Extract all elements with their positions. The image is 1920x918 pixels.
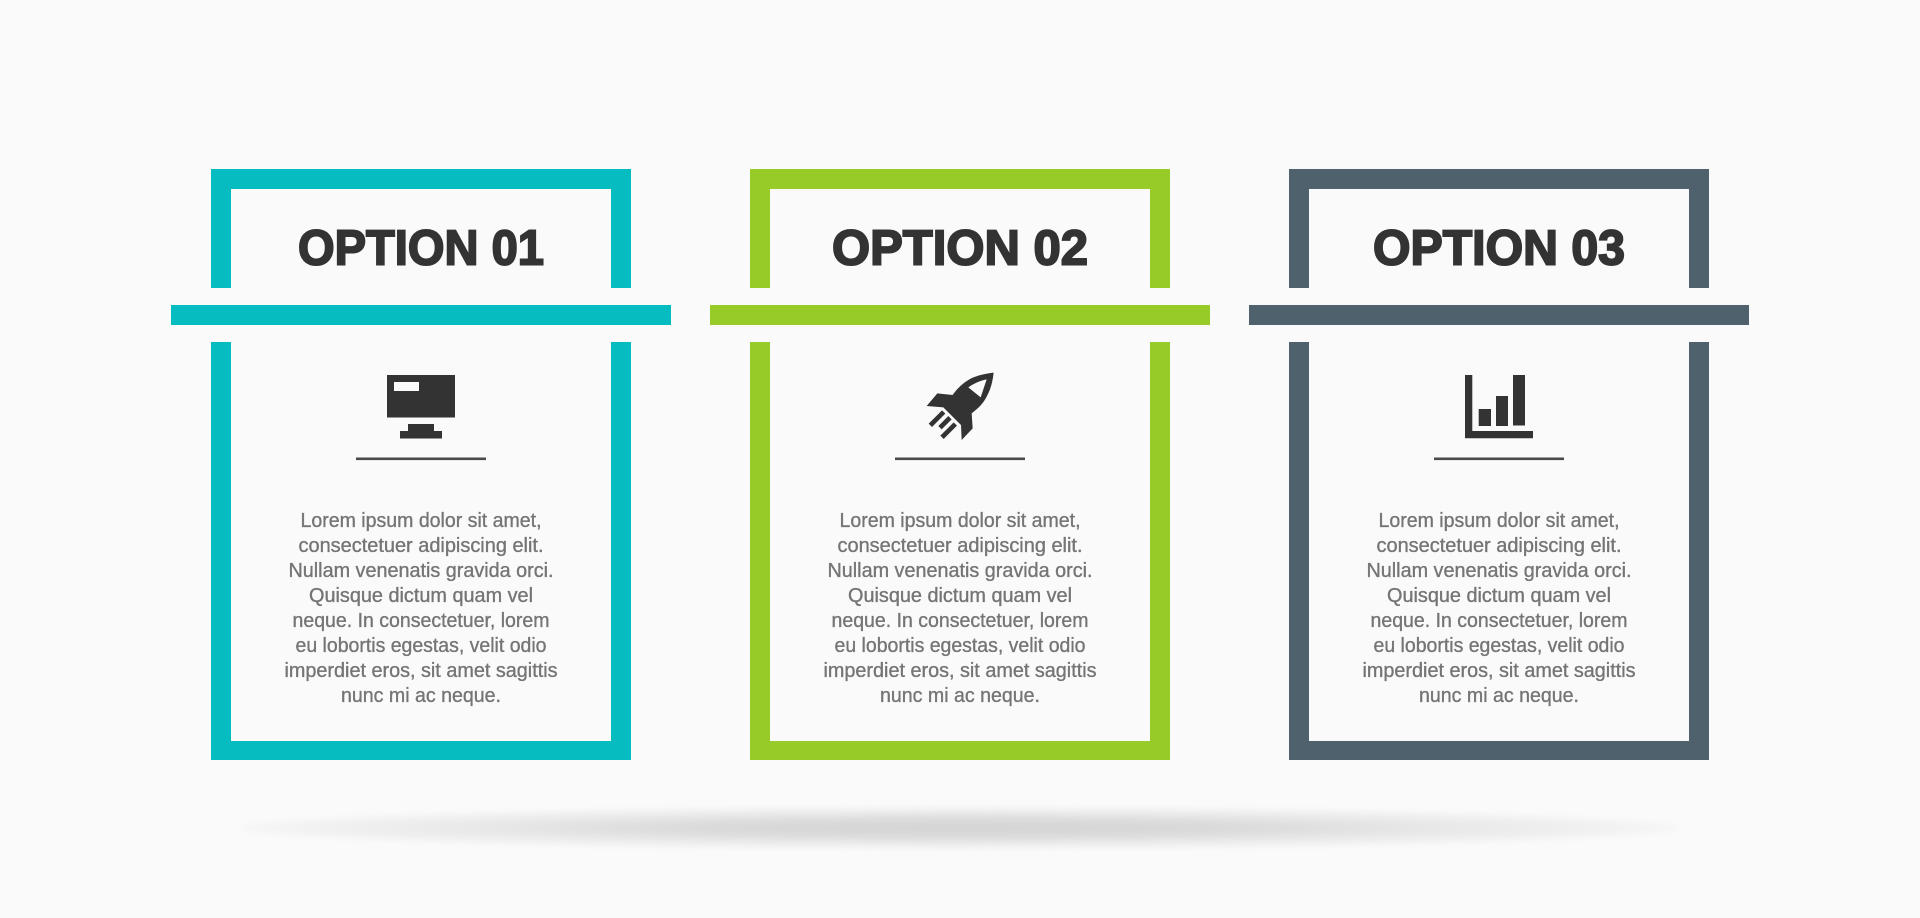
body text: Quisque dictum quam vel [1387,585,1611,607]
body text [1362,510,1636,707]
body text: Nullam venenatis gravida orci. [1366,560,1632,582]
upper frame [211,169,631,288]
body text: Lorem ipsum dolor sit amet, [840,510,1080,532]
separator line [356,458,486,460]
body text [824,510,1096,707]
body text: Lorem ipsum dolor sit amet, [300,510,542,532]
body text: Quisque dictum quam vel [848,585,1072,607]
body text: consectetuer adipiscing elit. [838,535,1082,557]
icon: monitor [387,375,455,438]
panel: option 02 [710,169,1210,760]
ground shadow [239,807,1681,849]
body text: Lorem ipsum dolor sit amet, [1378,510,1620,532]
upper frame [1289,169,1709,288]
panel: option 01 [171,169,671,760]
body text: nunc mi ac neque. [341,685,501,707]
divider bar [710,305,1210,325]
lower frame [211,342,631,760]
body text: Nullam venenatis gravida orci. [288,560,554,582]
body text: consectetuer adipiscing elit. [1376,535,1622,557]
body text [284,510,558,707]
lower frame [750,342,1170,760]
separator line [1434,458,1564,460]
body text: imperdiet eros, sit amet sagittis [1362,660,1636,682]
lower frame [1289,342,1709,760]
body text: imperdiet eros, sit amet sagittis [284,660,558,682]
body text: eu lobortis egestas, velit odio [834,635,1086,657]
heading: OPTION 02 [832,222,1088,276]
body text: Quisque dictum quam vel [309,585,533,607]
body text: neque. In consectetuer, lorem [1370,610,1628,632]
body text: consectetuer adipiscing elit. [298,535,544,557]
body text: neque. In consectetuer, lorem [832,610,1088,632]
icon: bar chart [1465,375,1533,438]
separator line [895,458,1025,460]
panel: option 03 [1249,169,1749,760]
body text: eu lobortis egestas, velit odio [1374,635,1624,657]
body text: nunc mi ac neque. [1419,685,1579,707]
heading: OPTION 03 [1373,222,1625,276]
divider bar [171,305,671,325]
heading: OPTION 01 [298,222,544,276]
body text: nunc mi ac neque. [880,685,1040,707]
upper frame [750,169,1170,288]
body text: eu lobortis egestas, velit odio [296,635,546,657]
body text: neque. In consectetuer, lorem [292,610,550,632]
body text: Nullam venenatis gravida orci. [828,560,1092,582]
body text: imperdiet eros, sit amet sagittis [824,660,1096,682]
divider bar [1249,305,1749,325]
icon: rocket [927,373,994,440]
